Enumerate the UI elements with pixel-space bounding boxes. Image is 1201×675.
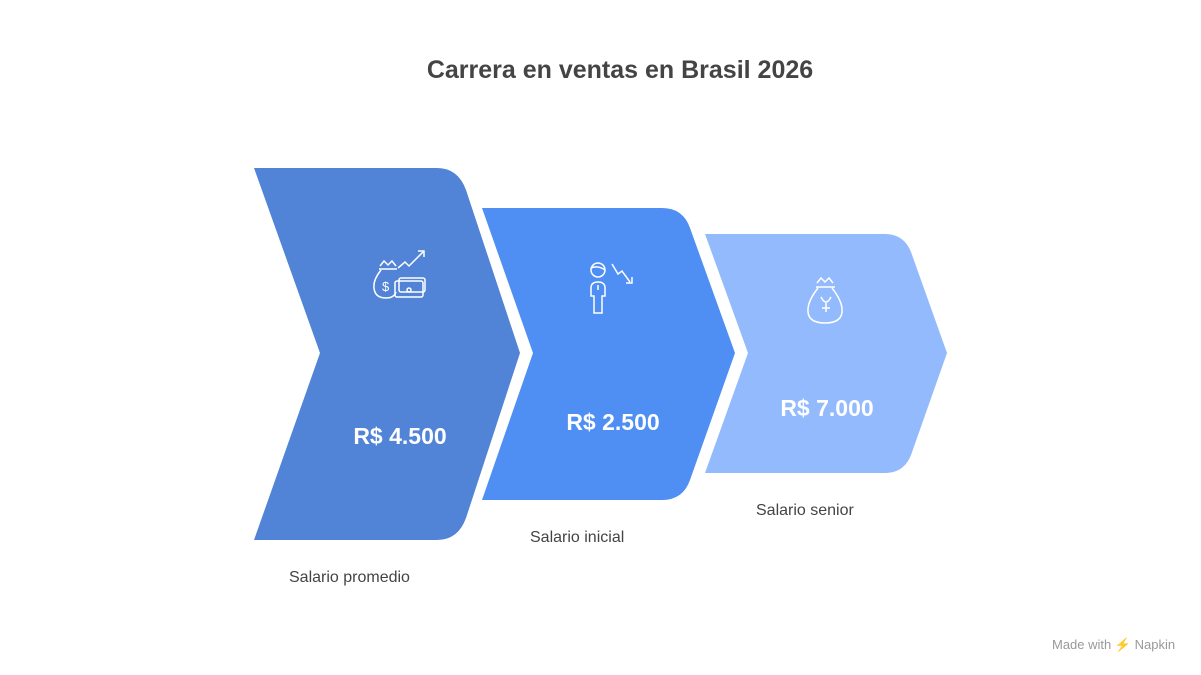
icon: money bag with chart: $ <box>382 279 390 294</box>
value: R$ 4.500 <box>353 423 447 449</box>
icon: money bag yen <box>808 278 842 323</box>
label: salario promedio: Salario promedio <box>289 569 410 586</box>
icon: person with down arrow <box>591 263 632 313</box>
footer: made with napkin: Made with ⚡ Napkin <box>1052 637 1175 652</box>
icon: money bag with chart <box>374 251 425 298</box>
chevron: salario promedio <box>254 168 520 540</box>
label: salario senior: Salario senior <box>756 502 854 519</box>
value: R$ 2.500 <box>566 409 660 435</box>
label: salario inicial: Salario inicial <box>530 529 624 546</box>
chevron: salario inicial <box>482 208 735 500</box>
chevron: salario senior <box>705 234 947 473</box>
title: Carrera en ventas en Brasil 2026 <box>427 56 813 84</box>
value: R$ 7.000 <box>780 395 874 421</box>
